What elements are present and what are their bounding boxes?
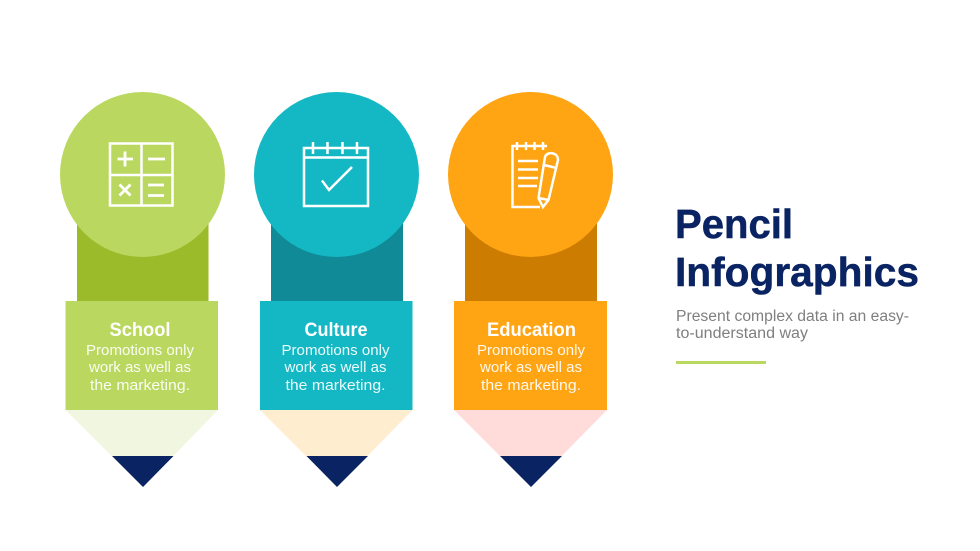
card text: Culture: work as well as (283, 360, 386, 376)
card: Education (454, 301, 607, 410)
card heading: Education: Education (487, 320, 576, 341)
subtitle (676, 308, 909, 342)
title: Pencil (675, 201, 793, 247)
card text: School: Promotions only (86, 343, 195, 359)
pencil lead: Culture (306, 456, 368, 487)
pencil shaft: Education (465, 220, 597, 302)
card text: Culture: the marketing. (286, 378, 386, 394)
pencil tip wood: Culture (260, 410, 412, 487)
icon: calendar with check (304, 142, 368, 206)
subtitle: Present complex data in an easy- (676, 308, 909, 325)
pencil shaft: School (77, 220, 208, 302)
card text: Education (477, 343, 586, 394)
card: Culture (260, 301, 412, 410)
pencil tip wood: Education (454, 410, 607, 487)
subtitle: to-understand way (676, 325, 808, 342)
card heading: School: School (110, 320, 170, 341)
pencil: Education (448, 92, 613, 487)
card text: School: work as well as (88, 360, 191, 376)
pencil tip wood: School (66, 410, 218, 487)
pencil shaft: Culture (271, 220, 403, 302)
card text: Education: Promotions only (477, 343, 586, 359)
pencil: School (60, 92, 225, 487)
title: Infographics (675, 249, 919, 295)
pencil lead: Education (500, 456, 562, 487)
card text: Education: work as well as (479, 360, 582, 376)
card text: School: the marketing. (90, 378, 190, 394)
accent line (676, 361, 766, 364)
card: School (66, 301, 218, 410)
circle: School (60, 92, 225, 257)
card text: School (86, 343, 195, 394)
card text: Education: the marketing. (481, 378, 581, 394)
title (675, 201, 919, 295)
card text: Culture (282, 343, 390, 394)
pencil lead: School (112, 456, 174, 487)
icon: calculator (110, 144, 172, 206)
icon: notepad and pencil (512, 142, 558, 207)
circle: Culture (254, 92, 419, 257)
card heading: Culture: Culture (304, 320, 368, 341)
pencil: Culture (254, 92, 419, 487)
circle: Education (448, 92, 613, 257)
card text: Culture: Promotions only (282, 343, 390, 359)
